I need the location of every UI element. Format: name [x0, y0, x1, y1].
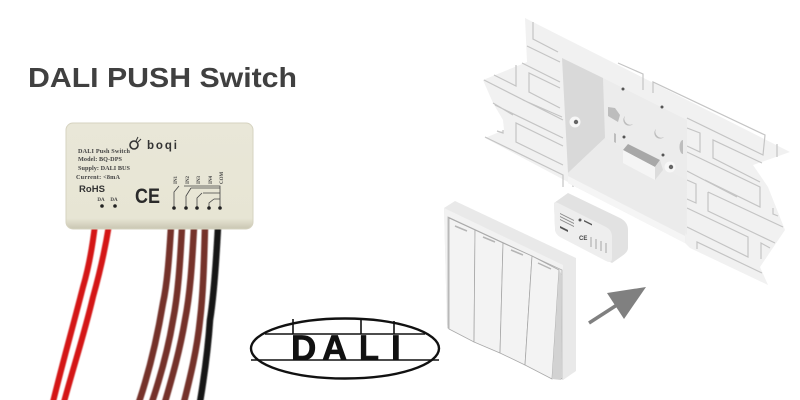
- device label text: Model: BQ-DPS: [78, 156, 123, 163]
- DALI logo: D: [291, 329, 316, 368]
- box knockouts and holes: [608, 107, 683, 180]
- rocker panels: [449, 218, 559, 379]
- device label text: Current: <8mA: [76, 174, 121, 181]
- arrow: [589, 287, 646, 323]
- terminal schematic: IN1: [174, 175, 179, 184]
- device: DALI push switch module: [66, 123, 253, 229]
- DALI logo: I: [391, 329, 401, 368]
- RoHS mark: RoHS: [79, 184, 105, 195]
- wires: [53, 225, 218, 400]
- junction box floor: [568, 138, 687, 243]
- brick lines: [484, 22, 783, 273]
- DALI logo: A: [322, 329, 347, 368]
- title: DALI PUSH Switch: [28, 62, 297, 93]
- small module illustration: CE: [579, 236, 587, 242]
- terminal schematic: IN4: [209, 175, 214, 184]
- device label text: Supply: DALI BUS: [78, 165, 131, 172]
- logo: boqi: [130, 137, 177, 152]
- wall switch illustration: [444, 201, 576, 380]
- logo: boqi: boqi: [147, 140, 177, 152]
- terminal schematic: [172, 172, 225, 210]
- terminal schematic: COM: [220, 172, 225, 184]
- device label text: [76, 148, 131, 181]
- DA terminals: DA: [110, 198, 118, 203]
- junction box left wall: [562, 58, 605, 173]
- lower lip of box: [568, 176, 685, 243]
- CE mark: CE: [135, 185, 160, 208]
- wall with bricks: [483, 18, 790, 285]
- DA terminals: DA: [97, 198, 105, 203]
- DALI logo: [251, 318, 439, 378]
- screw lugs: [570, 116, 676, 172]
- junction box back: [603, 78, 687, 235]
- terminal schematic: IN2: [186, 175, 191, 184]
- device label text: DALI Push Switch: [78, 148, 131, 155]
- terminal schematic: IN3: [197, 175, 202, 184]
- DA terminals: [97, 198, 118, 208]
- DALI logo: L: [359, 329, 379, 368]
- small module illustration: [554, 193, 628, 263]
